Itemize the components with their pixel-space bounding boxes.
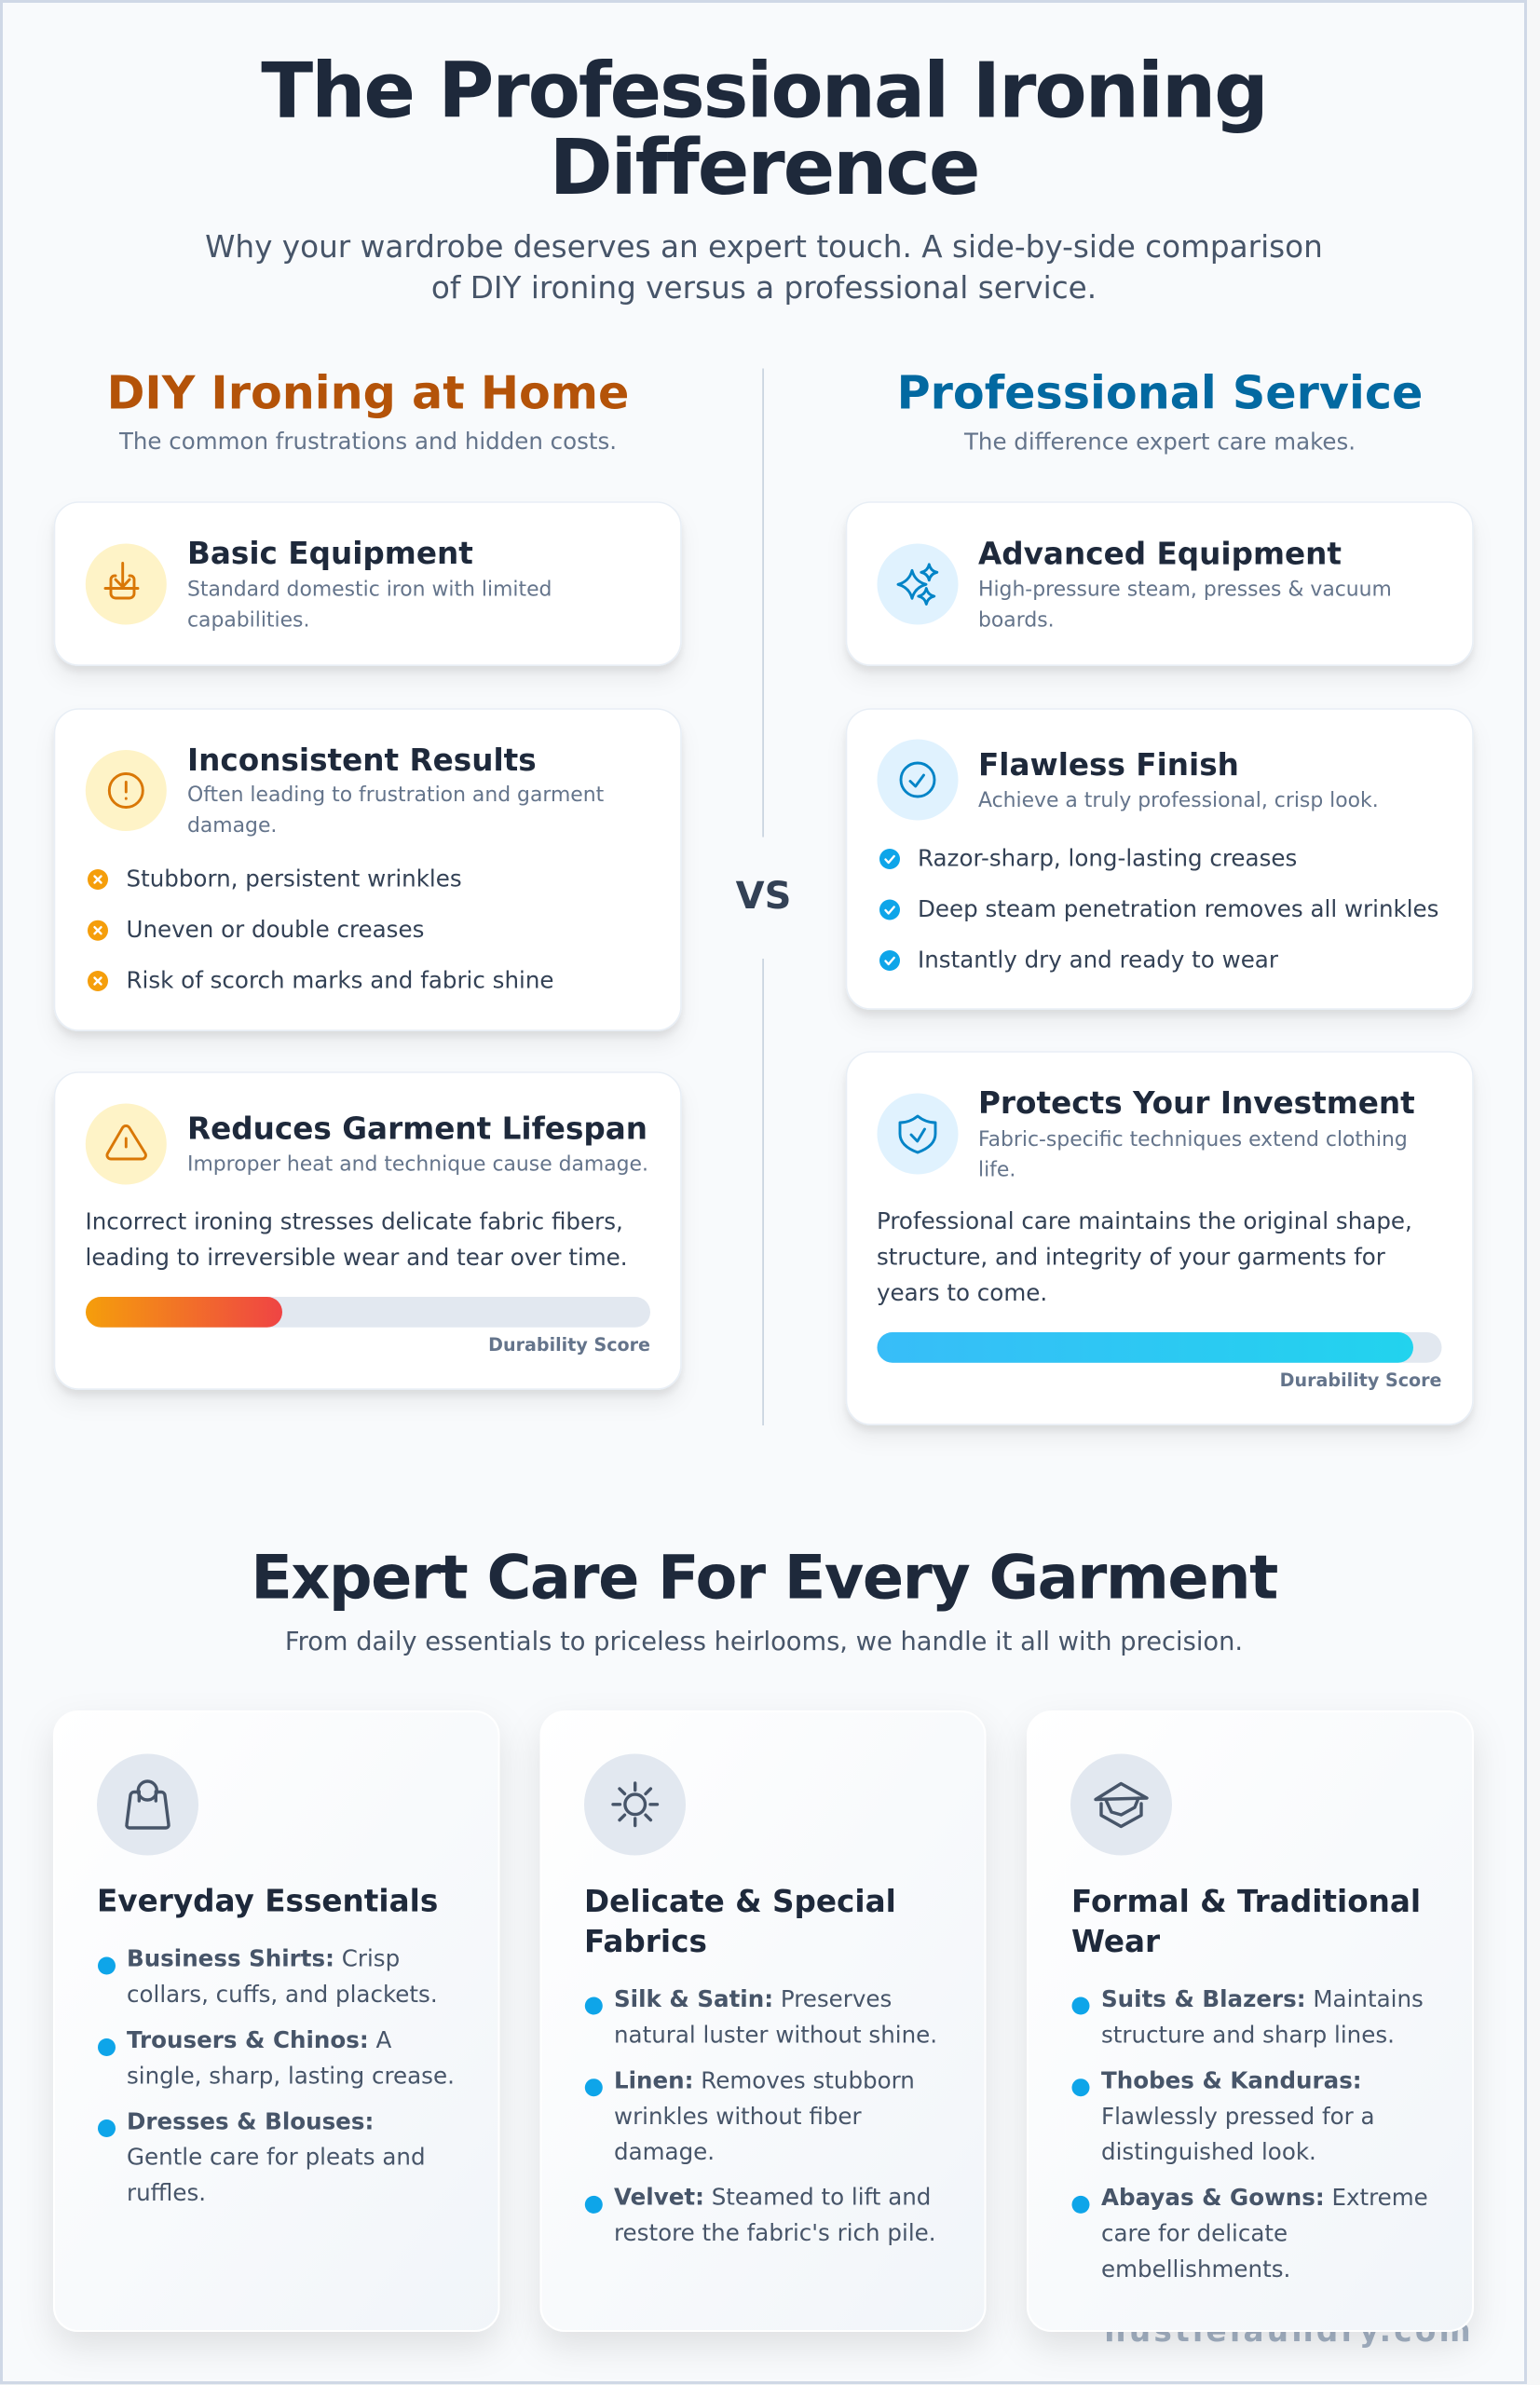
paragraph: leading to irreversible wear and tear over time.	[86, 1244, 628, 1271]
section subtitle: From daily essentials to priceless heirlooms, we handle it all with precision.	[285, 1628, 1243, 1656]
card heading: Reduces Garment Lifespan	[187, 1111, 647, 1146]
list: problems: Risk of scorch marks and fabric shine	[127, 967, 553, 993]
list: formal garments: Suits & Blazers: Maintains	[1101, 1985, 1424, 2012]
durability bar: low	[86, 1297, 650, 1356]
icon: sun	[584, 1753, 686, 1856]
watermark: hustlelaundry.com	[1104, 2313, 1474, 2349]
card heading: Wear	[1071, 1924, 1161, 1959]
paragraph: Professional care maintains the original shape,	[877, 1207, 1412, 1234]
column heading: DIY	[107, 366, 629, 455]
card description: High-pressure steam, presses & vacuum	[978, 578, 1392, 602]
column heading: DIY: DIY Ironing at Home	[107, 366, 629, 420]
icon: iron	[86, 544, 167, 624]
list: benefits	[879, 844, 1438, 973]
list: delicate garments: natural luster without shine.	[614, 2022, 937, 2048]
panel: inconsistent results	[54, 709, 681, 1030]
list: problems	[88, 865, 553, 993]
panel: reduces garment lifespan	[54, 1072, 681, 1389]
list: formal garments: Abayas & Gowns: Extreme	[1101, 2184, 1428, 2211]
list: delicate garments: wrinkles without fiber	[614, 2103, 863, 2130]
card heading: Basic Equipment	[187, 536, 473, 571]
panel: basic equipment	[54, 502, 681, 665]
list: everyday garments: single, sharp, lasting crease.	[127, 2062, 455, 2089]
list: delicate garments: damage.	[614, 2138, 715, 2165]
list: delicate garments: Linen: Removes stubborn	[614, 2066, 915, 2093]
column heading: DIY: The common frustrations and hidden costs.	[118, 428, 617, 455]
card description: Standard domestic iron with limited	[187, 578, 552, 602]
section heading: Expert Care For Every Garment	[251, 1543, 1277, 1614]
list: formal garments	[1071, 1985, 1428, 2283]
card heading	[584, 1884, 896, 1959]
card heading: Everyday Essentials	[97, 1884, 438, 1919]
column heading: professional	[897, 366, 1423, 455]
subtitle: of DIY ironing versus a professional service.	[431, 270, 1097, 306]
panel: advanced equipment	[846, 502, 1473, 665]
paragraph	[877, 1207, 1412, 1306]
card heading: Protects Your Investment	[978, 1085, 1415, 1121]
card description: life.	[978, 1159, 1015, 1181]
card heading: Inconsistent Results	[187, 743, 537, 778]
paragraph: Incorrect ironing stresses delicate fabric fibers,	[86, 1207, 623, 1235]
subtitle	[205, 229, 1323, 306]
card heading: Formal & Traditional	[1071, 1884, 1421, 1919]
title: Difference	[550, 124, 978, 212]
list: formal garments: embellishments.	[1101, 2256, 1290, 2283]
list: everyday garments: Trousers & Chinos: A	[127, 2026, 391, 2053]
paragraph: structure, and integrity of your garments for	[877, 1243, 1386, 1271]
durability bar: high: Durability Score	[1280, 1370, 1442, 1391]
list: formal garments: distinguished look.	[1101, 2138, 1316, 2165]
card description	[187, 784, 605, 838]
list: everyday garments: Dresses & Blouses:	[127, 2107, 374, 2134]
list: everyday garments: Gentle care for pleats and	[127, 2144, 426, 2171]
list: problems: Uneven or double creases	[127, 916, 424, 943]
card description: capabilities.	[187, 609, 309, 632]
list: formal garments: Flawlessly pressed for a	[1101, 2103, 1375, 2130]
list: delicate garments: restore the fabric's rich pile.	[614, 2219, 936, 2246]
list: delicate garments: Silk & Satin: Preserves	[614, 1985, 892, 2012]
card description: Achieve a truly professional, crisp look.	[978, 789, 1379, 812]
column heading: professional: Professional Service	[897, 366, 1423, 420]
card description: Often leading to frustration and garment	[187, 784, 605, 807]
subtitle: Why your wardrobe deserves an expert touch. A side-by-side comparison	[205, 229, 1323, 265]
icon: shield	[878, 1094, 958, 1174]
list: problems: Stubborn, persistent wrinkles	[127, 865, 462, 893]
list: benefits: Instantly dry and ready to wear	[918, 947, 1279, 973]
durability bar: low: Durability Score	[488, 1334, 650, 1356]
card description: damage.	[187, 814, 277, 838]
panel: everyday essentials	[54, 1711, 499, 2331]
divider with VS badge: VS	[736, 875, 791, 918]
icon: graduation cap	[1070, 1753, 1172, 1856]
icon: check circle	[878, 740, 958, 820]
icon: sparkles	[878, 544, 958, 624]
icon: warning triangle	[86, 1103, 167, 1185]
title: The Professional Ironing	[261, 47, 1267, 136]
card description: Improper heat and technique cause damage.	[187, 1153, 648, 1177]
panel: formal and traditional wear	[1028, 1711, 1473, 2331]
card description: boards.	[978, 609, 1055, 632]
panel: flawless finish	[846, 709, 1473, 1009]
card heading: Delicate & Special	[584, 1884, 896, 1919]
column heading: professional: The difference expert care makes.	[963, 429, 1356, 455]
list: benefits: Razor-sharp, long-lasting creases	[918, 844, 1297, 872]
card description: Fabric-specific techniques extend clothing	[978, 1128, 1408, 1152]
panel: protects your investment	[846, 1052, 1473, 1424]
card description	[978, 578, 1392, 632]
list: benefits: Deep steam penetration removes all wrinkles	[918, 895, 1438, 922]
list: delicate garments	[585, 1985, 937, 2246]
paragraph: years to come.	[877, 1279, 1047, 1306]
card description	[978, 1128, 1408, 1181]
list: formal garments: care for delicate	[1101, 2219, 1288, 2247]
card description	[187, 578, 552, 632]
list: delicate garments: Velvet: Steamed to lift and	[614, 2183, 931, 2210]
icon: alert circle	[86, 750, 167, 831]
list: everyday garments: ruffles.	[127, 2179, 206, 2206]
list: everyday garments: Business Shirts: Crisp	[127, 1945, 400, 1971]
list: everyday garments	[98, 1945, 455, 2206]
list: formal garments: Thobes & Kanduras:	[1101, 2066, 1362, 2093]
card heading: Advanced Equipment	[978, 536, 1342, 571]
list: formal garments: structure and sharp lines.	[1101, 2021, 1395, 2048]
card heading: Flawless Finish	[978, 747, 1239, 783]
title	[261, 47, 1267, 212]
list: everyday garments: collars, cuffs, and plackets.	[127, 1981, 438, 2008]
card heading	[1071, 1884, 1421, 1959]
paragraph	[86, 1207, 628, 1271]
icon: shopping bag	[97, 1753, 198, 1856]
panel: delicate and special fabrics	[540, 1711, 986, 2331]
durability bar: high	[878, 1332, 1442, 1391]
card heading: Fabrics	[584, 1924, 707, 1959]
